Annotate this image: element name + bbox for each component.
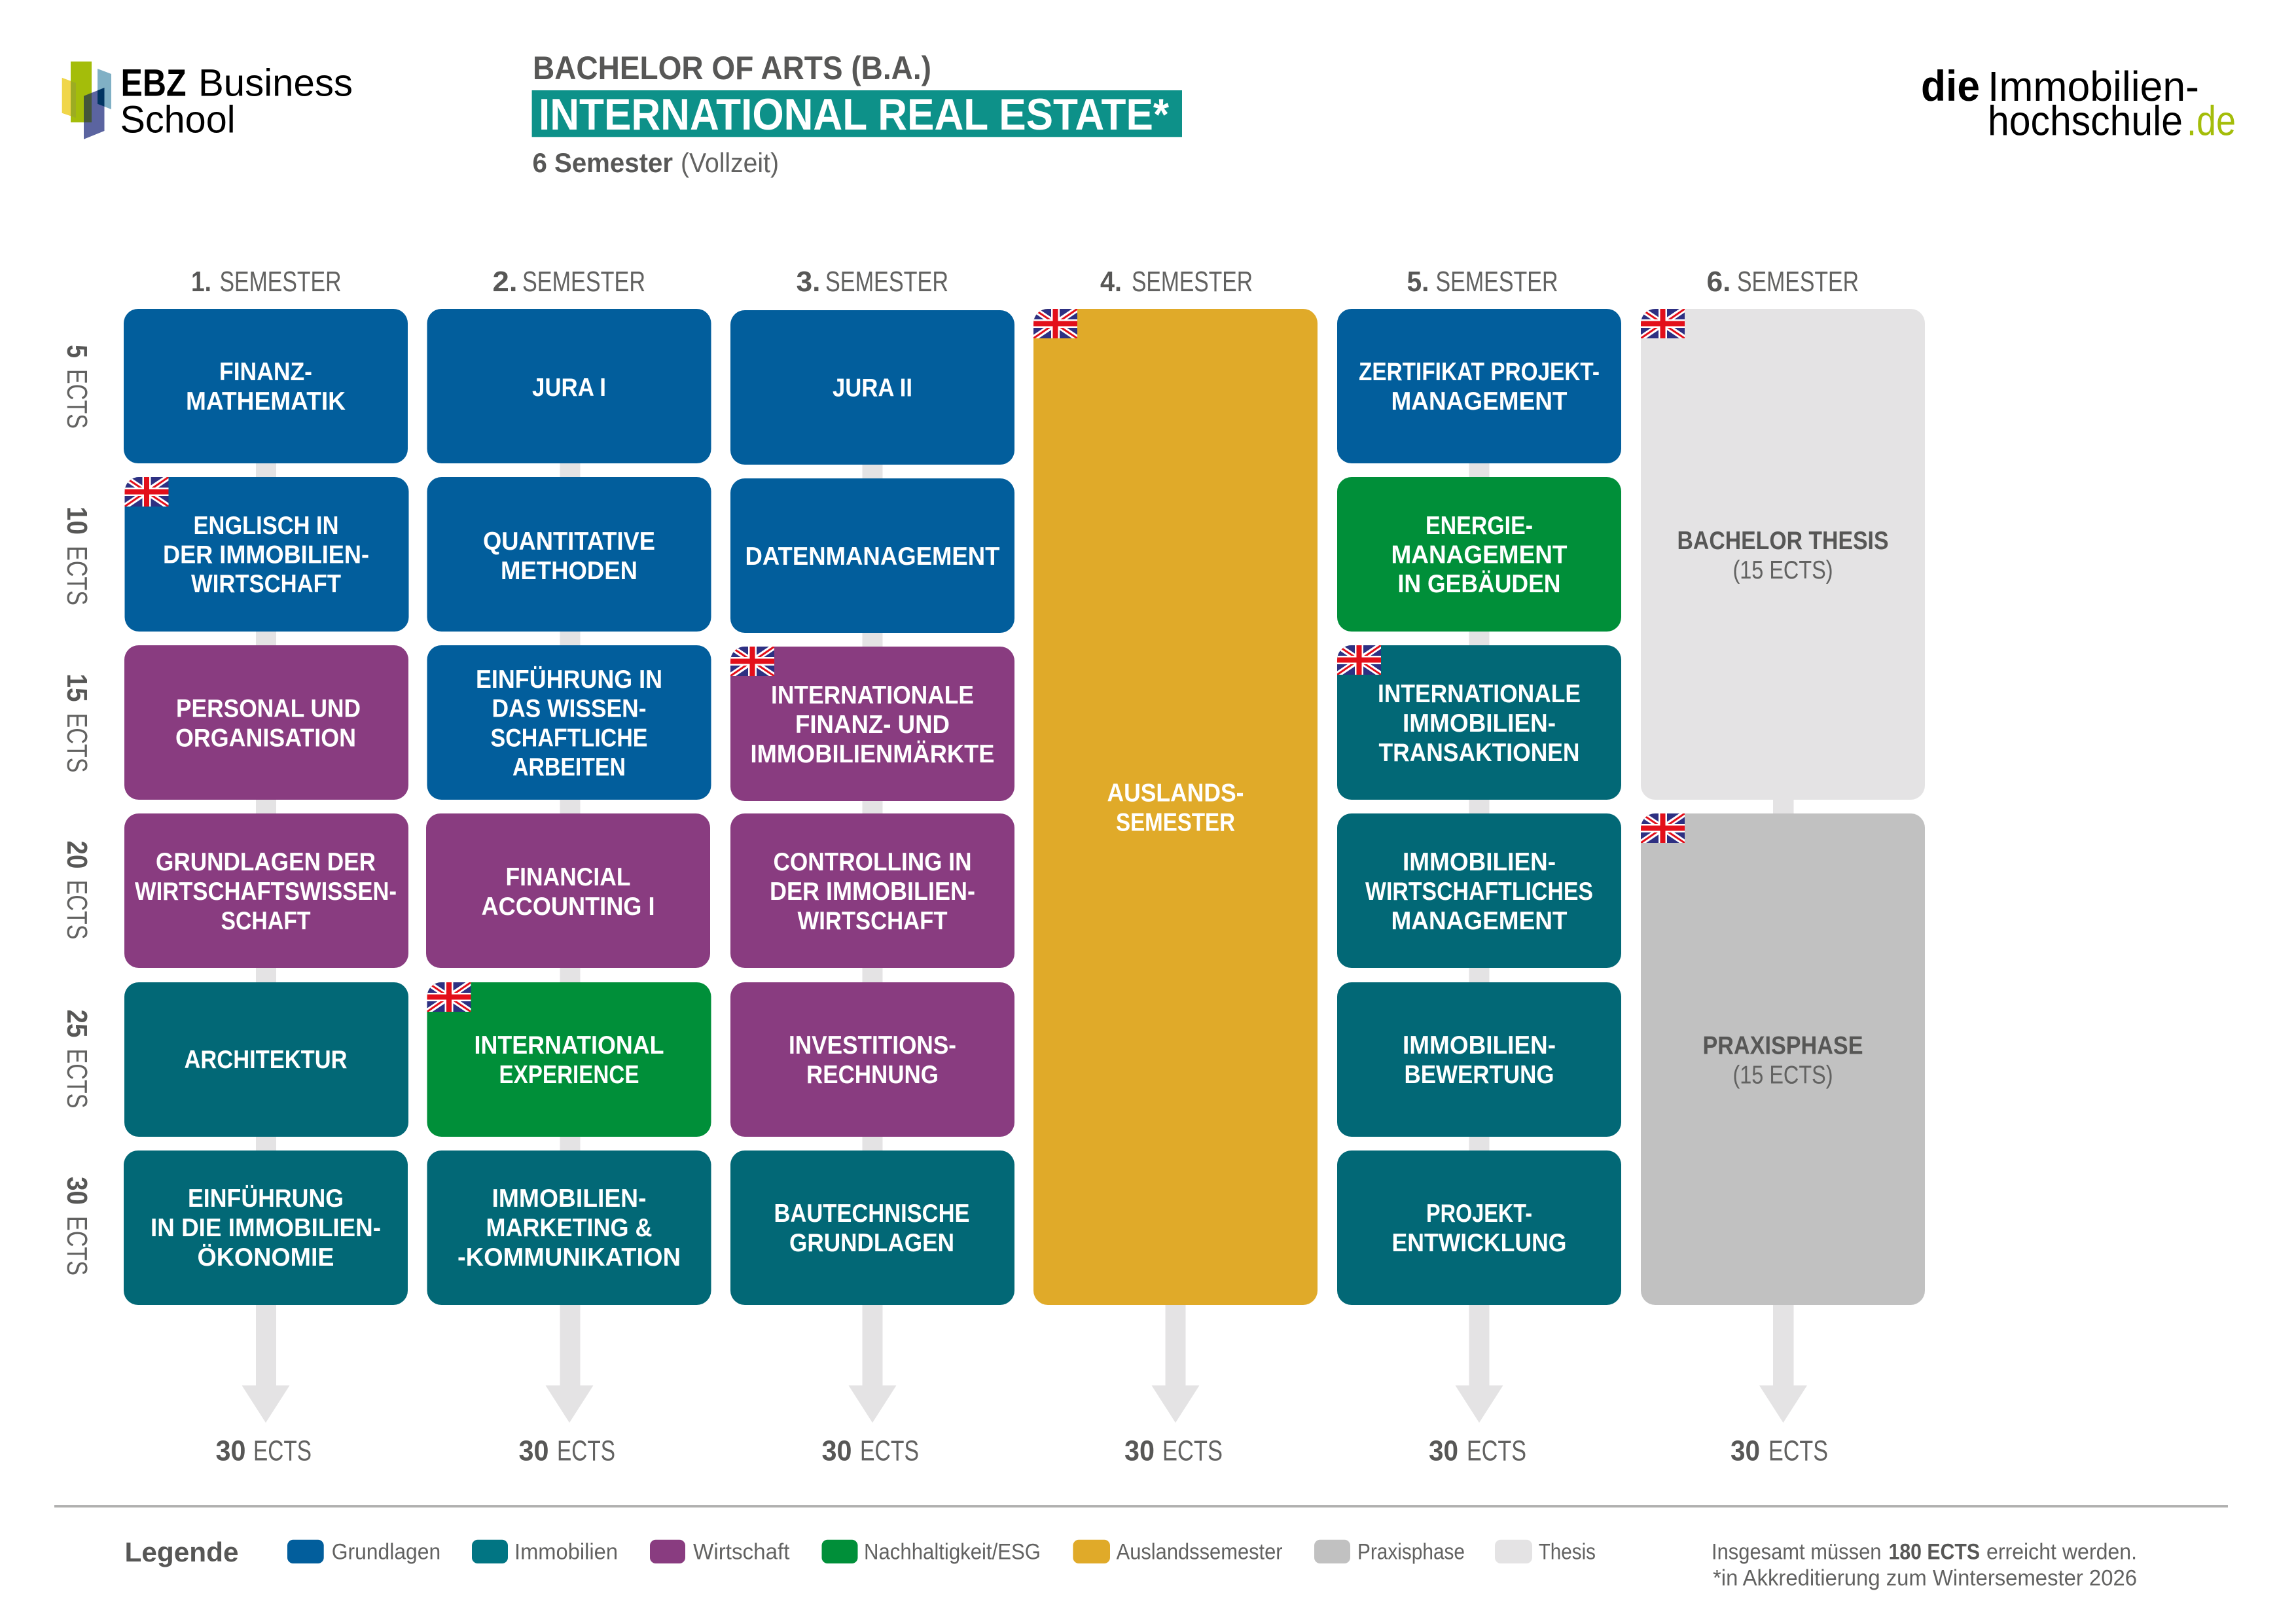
logo: die Immobilienhochschule.de: die bbox=[1921, 62, 1980, 110]
module: Praxisphase: PRAXISPHASE bbox=[1703, 1031, 1863, 1060]
total: 30 ECTS bbox=[1429, 1435, 1526, 1467]
arrows: semester flow bbox=[242, 314, 1807, 1423]
total: 30 ECTS: 30 bbox=[518, 1435, 548, 1467]
legend item: Immobilien bbox=[472, 1540, 618, 1565]
module: Internationale Immobilientransaktionen: INTERNATIONALE bbox=[1378, 680, 1581, 708]
logo: die Immobilienhochschule.de bbox=[1921, 62, 2236, 145]
axis label: 20 ECTS bbox=[61, 840, 93, 940]
module: Bachelor Thesis: (15 ECTS) bbox=[1733, 556, 1833, 584]
axis label: 10 ECTS bbox=[61, 507, 93, 605]
legend heading: Legende bbox=[124, 1537, 238, 1567]
total: 30 ECTS bbox=[1124, 1435, 1223, 1467]
module: Einführung in das wissenschaftliche Arbeiten: DAS WISSEN- bbox=[492, 695, 647, 722]
module: Datenmanagement bbox=[730, 478, 1014, 633]
module: Quantitative Methoden bbox=[427, 477, 711, 632]
module: Controlling in der Immobilienwirtschaft: DER IMMOBILIEN- bbox=[770, 878, 975, 906]
header: 5. Semester: SEMESTER bbox=[1436, 266, 1558, 298]
note: total ECTS and accreditation: Insgesamt müssen bbox=[1712, 1540, 1881, 1565]
total: 30 ECTS: 30 bbox=[1124, 1435, 1155, 1467]
total: 30 ECTS: 30 bbox=[822, 1435, 852, 1467]
total: 30 ECTS: 30 bbox=[1429, 1435, 1458, 1467]
module: Jura I bbox=[427, 309, 711, 463]
module: Energiemanagement in Gebäuden bbox=[1337, 477, 1621, 632]
axis label: 20 ECTS: 20 bbox=[61, 840, 93, 869]
header: 1. Semester bbox=[191, 266, 342, 298]
column: 4. Semester bbox=[1033, 266, 1318, 1467]
total: 30 ECTS bbox=[216, 1435, 312, 1467]
header: 1. Semester: SEMESTER bbox=[220, 266, 342, 298]
module: Einführung in das wissenschaftliche Arbeiten: SCHAFTLICHE bbox=[491, 724, 648, 753]
module: Englisch in der Immobilienwirtschaft: DER IMMOBILIEN- bbox=[163, 541, 369, 569]
header: 2. Semester bbox=[492, 266, 645, 298]
legend item: Praxisphase bbox=[1314, 1540, 1465, 1565]
axis label: 25 ECTS: 25 bbox=[61, 1009, 93, 1038]
module: Finanzmathematik: FINANZ- bbox=[219, 358, 312, 386]
module: Architektur bbox=[124, 982, 408, 1137]
module: Grundlagen der Wirtschaftswissenschaft: GRUNDLAGEN DER bbox=[156, 848, 376, 876]
module: Bachelor Thesis bbox=[1641, 309, 1925, 800]
module: Projektentwicklung: PROJEKT- bbox=[1426, 1200, 1532, 1228]
module: Immobilienmarketing und -kommunikation: -KOMMUNIKATION bbox=[457, 1243, 681, 1272]
module: Internationale Immobilientransaktionen: IMMOBILIEN- bbox=[1403, 709, 1556, 738]
subtitle: duration bbox=[533, 147, 779, 178]
axis label: 5 ECTS: 5 bbox=[61, 345, 93, 358]
axis label: 5 ECTS bbox=[61, 345, 93, 429]
module: Controlling in der Immobilienwirtschaft bbox=[730, 813, 1014, 968]
axis label: 25 ECTS bbox=[61, 1009, 93, 1109]
module: Internationale Finanz- und Immobilienmärkte bbox=[730, 647, 1014, 801]
module: Controlling in der Immobilienwirtschaft: WIRTSCHAFT bbox=[797, 907, 948, 935]
module: Englisch in der Immobilienwirtschaft: WIRTSCHAFT bbox=[191, 570, 341, 598]
legend item: Auslandssemester: Auslandssemester bbox=[1117, 1540, 1283, 1565]
logo: EBZ Business School: Business bbox=[198, 62, 353, 105]
module: Internationale Immobilientransaktionen: TRANSAKTIONEN bbox=[1378, 739, 1580, 767]
module: Jura II bbox=[730, 310, 1014, 465]
legend item: Thesis: Thesis bbox=[1539, 1540, 1596, 1565]
legend item: Praxisphase: Praxisphase bbox=[1357, 1540, 1465, 1565]
module: Grundlagen der Wirtschaftswissenschaft: WIRTSCHAFTSWISSEN- bbox=[135, 878, 397, 906]
axis label: 20 ECTS: ECTS bbox=[61, 880, 93, 940]
legend item: Thesis bbox=[1495, 1540, 1596, 1565]
header: 4. Semester bbox=[1100, 266, 1253, 298]
module: Zertifikat Projektmanagement: ZERTIFIKAT PROJEKT- bbox=[1359, 358, 1600, 386]
module: Financial Accounting I: FINANCIAL bbox=[505, 863, 631, 891]
legend bbox=[124, 1537, 1596, 1567]
logo: EBZ Business School bbox=[62, 62, 353, 141]
column: 3. Semester bbox=[730, 266, 1014, 1467]
total: 30 ECTS: ECTS bbox=[557, 1435, 615, 1467]
axis label: 15 ECTS bbox=[61, 674, 93, 772]
header: 4. Semester: SEMESTER bbox=[1132, 266, 1253, 298]
total: 30 ECTS: ECTS bbox=[1467, 1435, 1526, 1467]
total: 30 ECTS bbox=[822, 1435, 919, 1467]
module: Financial Accounting I: ACCOUNTING I bbox=[482, 893, 655, 921]
header: 5. Semester bbox=[1407, 266, 1558, 298]
module: Auslandssemester: SEMESTER bbox=[1116, 809, 1235, 836]
module: Immobilienbewertung bbox=[1337, 982, 1621, 1137]
legend item: Wirtschaft bbox=[650, 1540, 790, 1565]
module: Einführung in die Immobilienökonomie bbox=[124, 1150, 408, 1305]
axis label: 10 ECTS: 10 bbox=[61, 507, 93, 535]
note: total ECTS and accreditation: *in Akkreditierung zum Wintersemester 2026 bbox=[1713, 1566, 2137, 1591]
module: Praxisphase bbox=[1641, 813, 1925, 1305]
module: Architektur: ARCHITEKTUR bbox=[185, 1046, 347, 1074]
module: Auslandssemester bbox=[1033, 309, 1318, 1305]
module: International Experience: EXPERIENCE bbox=[499, 1061, 639, 1089]
module: Immobilienmarketing und -kommunikation: MARKETING & bbox=[486, 1214, 652, 1242]
column: 1. Semester bbox=[124, 266, 408, 1467]
module: Immobilienwirtschaftliches Management: WIRTSCHAFTLICHES bbox=[1365, 878, 1593, 906]
module: International Experience bbox=[427, 982, 711, 1137]
module: Einführung in die Immobilienökonomie: IN DIE IMMOBILIEN- bbox=[151, 1214, 381, 1242]
axis label: 15 ECTS: ECTS bbox=[61, 713, 93, 772]
module: Energiemanagement in Gebäuden: IN GEBÄUDEN bbox=[1398, 570, 1560, 598]
heading: degree: BACHELOR OF ARTS (B.A.) bbox=[533, 50, 931, 86]
module: Internationale Immobilientransaktionen bbox=[1337, 645, 1621, 800]
module: Jura I: JURA I bbox=[532, 374, 606, 402]
logo: die Immobilienhochschule.de: hochschule bbox=[1988, 98, 2183, 145]
module: Bautechnische Grundlagen: BAUTECHNISCHE bbox=[774, 1200, 970, 1228]
module: Grundlagen der Wirtschaftswissenschaft: SCHAFT bbox=[221, 907, 311, 935]
module: Einführung in die Immobilienökonomie: ÖKONOMIE bbox=[198, 1243, 334, 1272]
module: Financial Accounting I bbox=[426, 813, 710, 968]
module: Einführung in das wissenschaftliche Arbeiten: ARBEITEN bbox=[512, 753, 626, 781]
logo: die Immobilienhochschule.de: Immobilien- bbox=[1988, 63, 2199, 110]
module: Immobilienbewertung: IMMOBILIEN- bbox=[1403, 1031, 1556, 1060]
module: Personal und Organisation: ORGANISATION bbox=[175, 724, 356, 753]
title: International Real Estate: INTERNATIONAL REAL ESTATE* bbox=[539, 90, 1169, 139]
module: Einführung in die Immobilienökonomie: EINFÜHRUNG bbox=[188, 1185, 344, 1213]
module: Englisch in der Immobilienwirtschaft: ENGLISCH IN bbox=[194, 512, 339, 540]
module: Finanzmathematik: MATHEMATIK bbox=[186, 387, 346, 416]
module: Zertifikat Projektmanagement bbox=[1337, 309, 1621, 463]
header: 5. Semester: 5. bbox=[1407, 266, 1429, 298]
total: 30 ECTS: ECTS bbox=[860, 1435, 919, 1467]
module: Investitionsrechnung: RECHNUNG bbox=[806, 1061, 939, 1089]
total: 30 ECTS: 30 bbox=[1731, 1435, 1760, 1467]
module: Praxisphase: (15 ECTS) bbox=[1733, 1061, 1833, 1089]
legend item: Immobilien: Immobilien bbox=[514, 1540, 618, 1565]
module: Immobilienwirtschaftliches Management: MANAGEMENT bbox=[1391, 907, 1568, 935]
module: Einführung in das wissenschaftliche Arbeiten bbox=[427, 645, 711, 800]
axis label: 25 ECTS: ECTS bbox=[61, 1048, 93, 1109]
header: 6. Semester: SEMESTER bbox=[1737, 266, 1859, 298]
legend item: Grundlagen bbox=[287, 1540, 440, 1565]
total: 30 ECTS bbox=[518, 1435, 615, 1467]
total: 30 ECTS: ECTS bbox=[1768, 1435, 1828, 1467]
ECTS axis labels bbox=[61, 345, 93, 1275]
column: 2. Semester bbox=[426, 266, 711, 1467]
module: Quantitative Methoden: QUANTITATIVE bbox=[483, 527, 655, 556]
module: Energiemanagement in Gebäuden: ENERGIE- bbox=[1426, 512, 1533, 540]
header: 3. Semester: SEMESTER bbox=[825, 266, 948, 298]
total: 30 ECTS: ECTS bbox=[1162, 1435, 1223, 1467]
module: Personal und Organisation bbox=[124, 645, 408, 800]
note: total ECTS and accreditation: erreicht werden. bbox=[1986, 1540, 2137, 1565]
axis label: 30 ECTS bbox=[61, 1177, 93, 1275]
module: Finanzmathematik bbox=[124, 309, 408, 463]
header: 1. Semester: 1. bbox=[191, 266, 211, 298]
note: total ECTS and accreditation bbox=[1712, 1540, 2137, 1591]
column: 6. Semester bbox=[1641, 266, 1925, 1467]
module: Investitionsrechnung bbox=[730, 982, 1014, 1137]
subtitle: duration: 6 Semester bbox=[533, 147, 673, 178]
module: Internationale Finanz- und Immobilienmärkte: INTERNATIONALE bbox=[771, 681, 974, 709]
module: Internationale Finanz- und Immobilienmärkte: FINANZ- UND bbox=[795, 711, 950, 739]
module: Investitionsrechnung: INVESTITIONS- bbox=[789, 1031, 956, 1060]
module: Zertifikat Projektmanagement: MANAGEMENT bbox=[1391, 387, 1568, 416]
module: Projektentwicklung: ENTWICKLUNG bbox=[1391, 1229, 1567, 1257]
legend item: Grundlagen: Grundlagen bbox=[332, 1540, 440, 1565]
axis label: 10 ECTS: ECTS bbox=[61, 546, 93, 605]
logo: EBZ Business School: EBZ bbox=[120, 62, 186, 105]
column: 5. Semester bbox=[1337, 266, 1621, 1467]
module: Bautechnische Grundlagen bbox=[730, 1150, 1014, 1305]
subtitle: duration: (Vollzeit) bbox=[681, 147, 779, 178]
module: Immobilienwirtschaftliches Management: IMMOBILIEN- bbox=[1403, 848, 1556, 876]
total: 30 ECTS: 30 bbox=[216, 1435, 246, 1467]
module: Immobilienmarketing und -kommunikation: IMMOBILIEN- bbox=[492, 1185, 647, 1213]
module: Bautechnische Grundlagen: GRUNDLAGEN bbox=[789, 1229, 954, 1257]
module: Controlling in der Immobilienwirtschaft: CONTROLLING IN bbox=[774, 848, 971, 876]
axis label: 15 ECTS: 15 bbox=[61, 674, 93, 702]
total: 30 ECTS: ECTS bbox=[253, 1435, 312, 1467]
module: Jura II: JURA II bbox=[833, 374, 912, 402]
header: 6. Semester: 6. bbox=[1707, 266, 1731, 298]
module: Immobilienbewertung: BEWERTUNG bbox=[1405, 1061, 1554, 1089]
header: 4. Semester: 4. bbox=[1100, 266, 1122, 298]
header: 6. Semester bbox=[1707, 266, 1859, 298]
header: 2. Semester: 2. bbox=[492, 266, 517, 298]
logo: die Immobilienhochschule.de: .de bbox=[2187, 98, 2236, 145]
module: Englisch in der Immobilienwirtschaft bbox=[124, 477, 408, 632]
axis label: 30 ECTS: ECTS bbox=[61, 1216, 93, 1275]
module: Datenmanagement: DATENMANAGEMENT bbox=[745, 543, 1000, 571]
legend item: Nachhaltigkeit/ESG: Nachhaltigkeit/ESG bbox=[864, 1540, 1041, 1565]
logo: EBZ Business School: School bbox=[120, 99, 236, 141]
header: 2. Semester: SEMESTER bbox=[522, 266, 645, 298]
header: 3. Semester bbox=[796, 266, 948, 298]
axis label: 30 ECTS: 30 bbox=[61, 1177, 93, 1205]
module: Grundlagen der Wirtschaftswissenschaft bbox=[124, 813, 408, 968]
total: 30 ECTS bbox=[1731, 1435, 1828, 1467]
module: Energiemanagement in Gebäuden: MANAGEMENT bbox=[1391, 541, 1568, 569]
axis label: 5 ECTS: ECTS bbox=[61, 369, 93, 429]
module: Internationale Finanz- und Immobilienmärkte: IMMOBILIENMÄRKTE bbox=[750, 740, 995, 768]
legend item: Wirtschaft: Wirtschaft bbox=[693, 1540, 790, 1565]
module: Auslandssemester: AUSLANDS- bbox=[1107, 779, 1244, 808]
module: International Experience: INTERNATIONAL bbox=[474, 1031, 664, 1060]
header: 3. Semester: 3. bbox=[796, 266, 821, 298]
module: Immobilienmarketing und -kommunikation bbox=[427, 1150, 711, 1305]
note: total ECTS and accreditation: 180 ECTS bbox=[1889, 1540, 1980, 1565]
module: Quantitative Methoden: METHODEN bbox=[501, 557, 637, 585]
module: Einführung in das wissenschaftliche Arbeiten: EINFÜHRUNG IN bbox=[476, 666, 662, 694]
module: Projektentwicklung bbox=[1337, 1150, 1621, 1305]
module: Bachelor Thesis: BACHELOR THESIS bbox=[1677, 527, 1889, 555]
module: Personal und Organisation: PERSONAL UND bbox=[176, 695, 361, 722]
module: Immobilienwirtschaftliches Management bbox=[1337, 813, 1621, 968]
